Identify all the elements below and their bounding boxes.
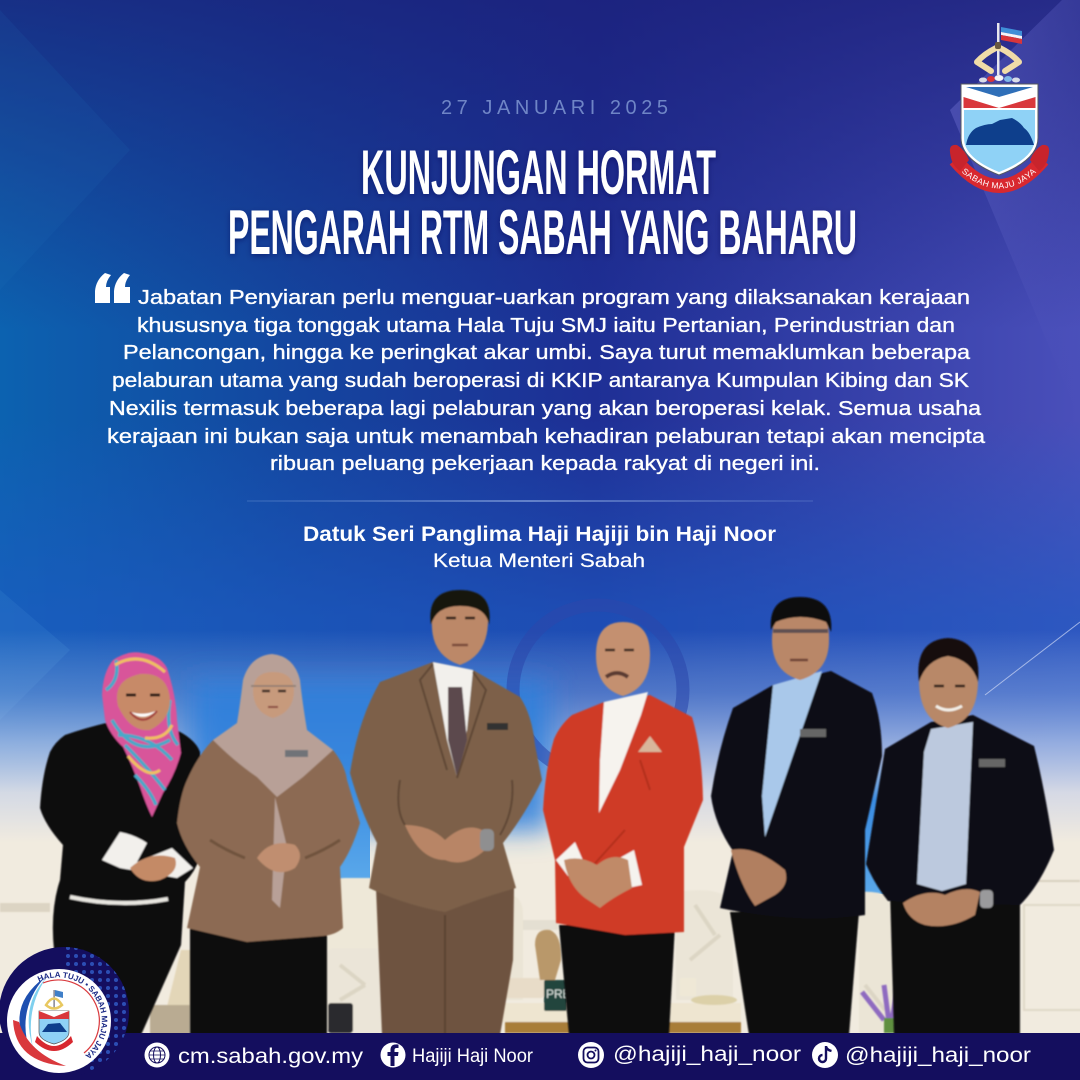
beads <box>979 75 1020 82</box>
footer bar <box>0 1033 1080 1080</box>
person 1: woman in black blazer with colourful scarf <box>40 652 201 1035</box>
photo group: six people <box>40 590 1054 1037</box>
facebook <box>380 1042 534 1068</box>
blue curtains glow <box>190 680 550 830</box>
photo backdrop: curtains, wall and sofas <box>0 605 1080 1035</box>
ribbon motto <box>950 144 1050 193</box>
quote text block: pelaburan utama yang sudah beroperasi di KKIP antaranya Kumpulan Kibing dan SK <box>112 369 969 392</box>
quote text block: Nexilis termasuk beberapa lagi pelaburan yang akan beroperasi kelak. Semua usaha <box>109 397 982 420</box>
arms holding the pole <box>977 42 1019 71</box>
quote text block: ribuan peluang pekerjaan kepada rakyat di negeri ini. <box>270 452 820 475</box>
person 6: man in black jacket <box>866 638 1054 1035</box>
quote text block: Pelancongan, hingga ke peringkat akar umbi. Saya turut memaklumkan beberapa <box>123 341 971 364</box>
tiktok <box>812 1042 1031 1068</box>
date: 27 JANUARI 2025 <box>441 97 668 119</box>
person 2: woman in brown blazer and beige hijab <box>177 654 360 1037</box>
quote text block: kerajaan ini bukan saja untuk menambah kehadiran pelaburan tetapi akan mencipta <box>107 425 986 448</box>
mini crest <box>35 990 73 1051</box>
facebook: Hajiji Haji Noor <box>412 1046 534 1067</box>
quote text block: khususnya tiga tonggak utama Hala Tuju SMJ iaitu Pertanian, Perindustrian dan <box>137 314 955 337</box>
title: KUNJUNGAN HORMAT <box>361 138 716 208</box>
instagram <box>578 1042 801 1068</box>
quote text block <box>107 286 986 475</box>
flag and pole <box>997 23 1022 75</box>
coffee table and objects: PRE <box>546 987 571 1001</box>
icon: quotation mark <box>95 273 130 303</box>
tiktok: @hajiji_haji_noor <box>845 1044 1031 1067</box>
person 5: man in black suit and blue shirt <box>711 597 882 1035</box>
wall panelling and door <box>0 880 1080 1035</box>
shield <box>961 84 1038 175</box>
speaker name: Datuk Seri Panglima Haji Hajiji bin Haji Noor <box>303 523 776 546</box>
website <box>144 1042 364 1068</box>
instagram: @hajiji_haji_noor <box>613 1043 801 1066</box>
icon: Sabah coat of arms <box>950 23 1050 193</box>
person 4: Chief Minister in red blazer <box>543 622 703 1035</box>
ribbon motto: SABAH MAJU JAYA <box>962 168 1036 189</box>
website: cm.sabah.gov.my <box>178 1045 364 1068</box>
person 3: man in brown suit <box>350 590 542 1035</box>
title <box>228 138 857 268</box>
coffee table and objects <box>437 930 956 1035</box>
badge: Hala Tuju Sabah Maju Jaya <box>0 947 129 1073</box>
quote text block: Jabatan Penyiaran perlu menguar-uarkan program yang dilaksanakan kerajaan <box>138 286 970 309</box>
sofas <box>326 878 892 1033</box>
badge: Hala Tuju Sabah Maju Jaya: HALA TUJU • SABAH MAJU JAYA <box>37 972 108 1058</box>
footer links <box>144 1042 1031 1068</box>
faint seal behind the group <box>513 605 683 775</box>
speaker role: Ketua Menteri Sabah <box>433 550 645 572</box>
